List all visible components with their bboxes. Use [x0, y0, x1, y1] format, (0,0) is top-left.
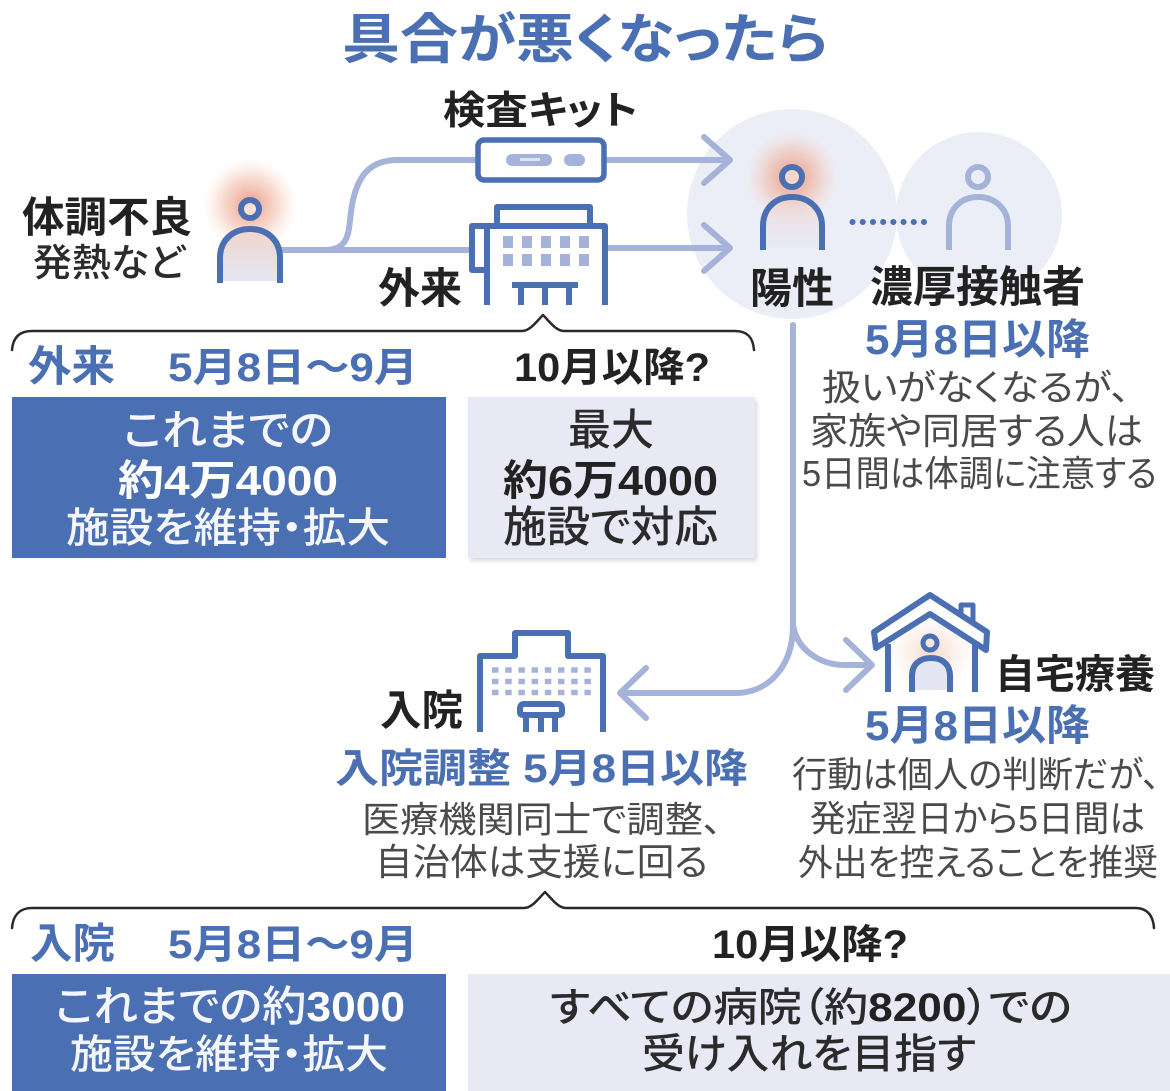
panel: outpatient May-September: これまでの: [123, 407, 333, 454]
panel: hospitalization May-September: これまでの約 3000: [55, 983, 405, 1030]
panel: hospitalization from October: 10月以降?: [712, 923, 908, 967]
icon: sick person: [203, 158, 297, 283]
text block: home care: 外出を控えることを推奨: [798, 842, 1158, 883]
panel: hospitalization from October: 受け入れを目指す: [642, 1031, 976, 1077]
text block: home care: 発症翌日から5日間は: [810, 798, 1145, 839]
text block: hospital coordination: 自治体は支援に回る: [375, 842, 708, 883]
panel: hospitalization May-September: 施設を維持・拡大: [70, 1033, 388, 1077]
text block: home care: 5月8日以降: [865, 702, 1090, 749]
text: 体調不良 発熱など: 発熱など: [33, 243, 187, 285]
route lines and arrows from symptom to positive: [282, 137, 730, 271]
text block: hospital coordination: [335, 747, 748, 883]
icon: test kit: [478, 140, 604, 180]
text: 体調不良 発熱など: [22, 194, 192, 285]
text block: close contacts: [802, 316, 1157, 494]
panel: outpatient May-September: 5月8日～9月: [168, 346, 418, 390]
panel: hospitalization from October: すべての病院（約 8200）での: [550, 986, 1072, 1030]
icon: outpatient clinic: [472, 207, 605, 305]
title: 具合が悪くなったら: [342, 10, 828, 70]
text: 体調不良 発熱など: 体調不良: [22, 194, 192, 241]
text block: hospital coordination: 医療機関同士で調整、: [362, 799, 722, 840]
panel: hospitalization May-September: 入院: [30, 920, 115, 967]
text block: close contacts: 家族や同居する人は: [810, 411, 1143, 452]
icon: house: [874, 595, 987, 692]
text block: close contacts: 5日間は体調に注意する: [802, 453, 1157, 494]
brace: outpatient: [12, 315, 754, 350]
label: 陽性: 陽性: [750, 265, 834, 312]
text block: home care: [792, 702, 1160, 883]
background circle: 濃厚接触者: [896, 132, 1062, 298]
brace: hospitalization: [12, 892, 1154, 928]
route lines and arrows from positive to care: [620, 325, 872, 718]
text block: hospital coordination: 入院調整 5月8日以降: [335, 747, 748, 791]
panel: hospitalization May-September: [12, 920, 446, 1091]
panel: hospitalization May-September: 5月8日～9月: [168, 923, 418, 967]
panel: outpatient from October: [468, 346, 755, 558]
panel: outpatient from October: 約6万4000: [503, 457, 718, 504]
text block: close contacts: 扱いがなくなるが、: [822, 367, 1130, 408]
label: 入院: 入院: [380, 687, 463, 734]
panel: outpatient May-September: 施設を維持・拡大: [66, 505, 390, 551]
background circle: 陽性: [687, 109, 897, 319]
icon: hospital: [480, 633, 603, 732]
panel: outpatient from October: 10月以降?: [514, 346, 710, 390]
panel: outpatient from October: 最大: [568, 407, 654, 455]
panel: outpatient May-September: 約4万4000: [118, 457, 338, 504]
dotted connector: [852, 219, 924, 225]
panel: outpatient from October: 施設で対応: [503, 504, 718, 552]
label: 自宅療養: 自宅療養: [995, 653, 1155, 697]
label: 外来: 外来: [378, 265, 462, 312]
heading: 検査キット: 検査キット: [443, 90, 638, 133]
label: 濃厚接触者: 濃厚接触者: [870, 264, 1085, 312]
icon: close contact person: [949, 167, 1008, 250]
panel: outpatient May-September: 外来: [28, 343, 115, 390]
icon: positive person: [745, 130, 839, 250]
text block: close contacts: 5月8日以降: [865, 316, 1090, 363]
panel: outpatient May-September: [12, 343, 446, 558]
panel: hospitalization from October: [468, 923, 1170, 1091]
text block: home care: 行動は個人の判断だが、: [792, 754, 1160, 795]
